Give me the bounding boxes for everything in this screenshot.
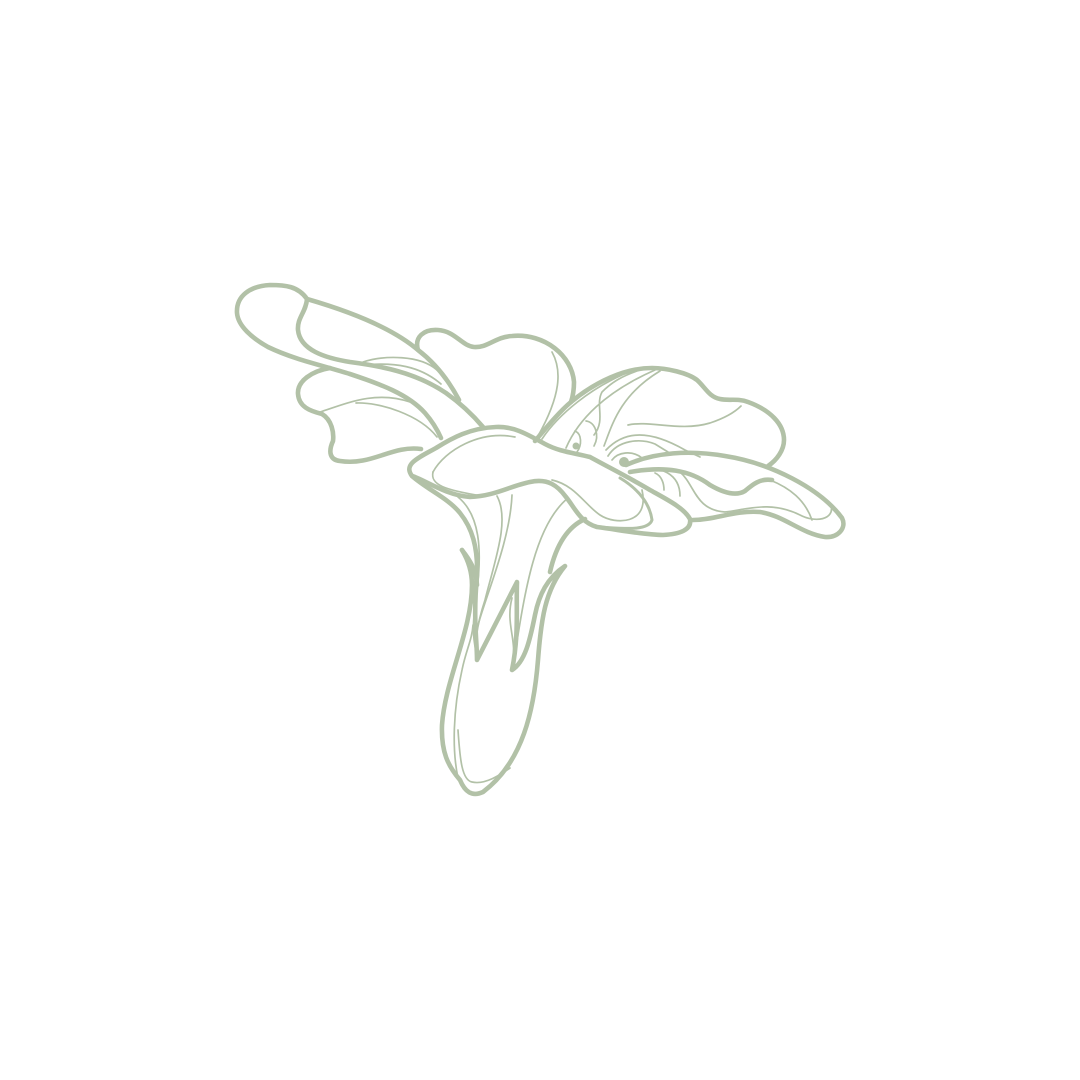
centre cap bbox=[409, 427, 690, 535]
stem and ruffled base bbox=[412, 476, 585, 794]
petal: lower right bbox=[626, 453, 843, 537]
petal: lower left bbox=[298, 368, 421, 462]
small stamen dots bbox=[572, 442, 629, 467]
fine inner veins bbox=[320, 352, 832, 783]
petal: top right bbox=[571, 368, 784, 466]
petal: upper left bbox=[237, 285, 483, 438]
petal: top centre bbox=[417, 330, 574, 441]
